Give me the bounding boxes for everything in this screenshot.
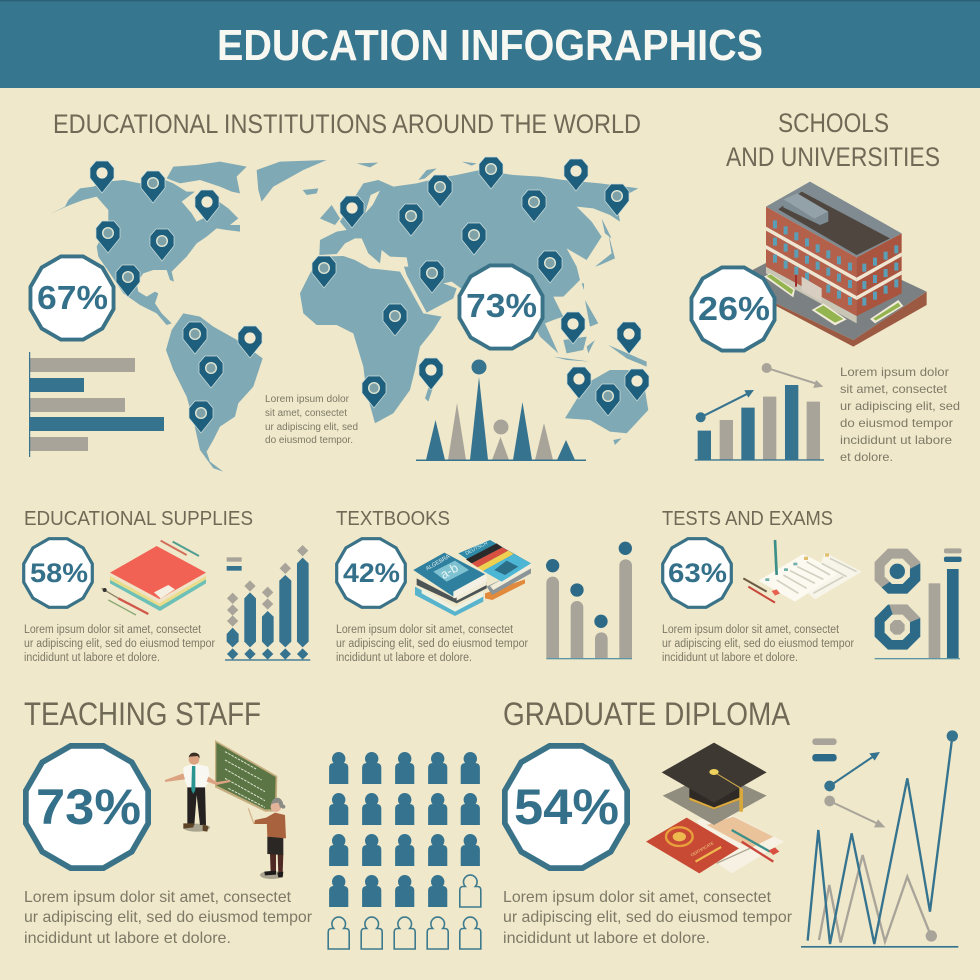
heading: educational institutions: EDUCATIONAL INSTITUTIONS AROUND THE WORLD: [53, 109, 641, 139]
illustration: exam sheets and pens: [743, 540, 862, 603]
panel: educational supplies: [24, 508, 310, 664]
heading: schools and universities: SCHOOLS: [778, 108, 889, 138]
badge: 73%: 73%: [36, 779, 141, 835]
text block: Lorem ipsum dolor sit amet, consectet: [503, 889, 772, 906]
badge: 58%: [24, 539, 92, 607]
Eurasia: [319, 170, 638, 353]
heading: schools and universities: [726, 108, 940, 172]
badge: 26%: 26%: [698, 290, 770, 327]
illustration: school building: [730, 182, 927, 347]
Arctic islands: [167, 162, 247, 193]
map caption text: [265, 394, 358, 446]
New Guinea: [608, 345, 647, 367]
heading: TESTS AND EXAMS: [662, 508, 833, 530]
text block: ur adipiscing elit, sed do eiusmod tempor: [336, 638, 528, 650]
text block: Lorem ipsum dolor sit amet, consectet: [24, 624, 202, 636]
text block: [662, 624, 854, 664]
illustration: stack of books: a-b: [438, 561, 461, 582]
schools text block: et dolore.: [840, 450, 893, 464]
Arctic islands: [418, 168, 437, 180]
Greenland: [257, 160, 327, 202]
text block: Lorem ipsum dolor sit amet, consectet: [336, 624, 514, 636]
text block: ur adipiscing elit, sed do eiusmod tempor: [662, 638, 854, 650]
text block: incididunt ut labore et dolore.: [24, 930, 231, 947]
schools text block: incididunt ut labore: [840, 433, 952, 447]
badge: 58%: 58%: [30, 558, 88, 588]
schools text block: sit amet, consectet: [840, 382, 948, 396]
map caption text: sit amet, consectet: [265, 408, 347, 419]
text block: ur adipiscing elit, sed do eiusmod tempor: [503, 909, 793, 926]
heading: EDUCATIONAL SUPPLIES: [24, 508, 253, 530]
text block: [336, 624, 528, 664]
badge: 42%: 42%: [343, 558, 400, 588]
badge: 63%: 63%: [668, 558, 727, 588]
illustration: cap and certificate: [646, 743, 784, 873]
Baltic sea: [365, 191, 380, 213]
octagon and bar chart: [875, 548, 962, 659]
South America: [166, 313, 263, 472]
Australia: [565, 370, 648, 433]
Britain: [320, 205, 340, 225]
illustration: cap and certificate: CERTIFICATE: [690, 840, 715, 858]
heading: TEXTBOOKS: [336, 508, 450, 530]
badge: 54%: 54%: [514, 779, 619, 835]
illustration: teachers at blackboard: [165, 740, 286, 879]
Madagascar: [425, 387, 433, 402]
badge: 73%: [26, 746, 148, 868]
horizontal bar chart: [29, 352, 164, 457]
text block: ur adipiscing elit, sed do eiusmod tempor: [24, 638, 215, 650]
badge: 67%: [30, 256, 114, 340]
text block: Lorem ipsum dolor sit amet, consectet: [24, 889, 292, 906]
schools text block: do eiusmod tempor: [840, 416, 953, 430]
schools text block: [840, 365, 960, 464]
North America: [50, 175, 240, 325]
Japan and Sakhalin: [595, 233, 615, 267]
text block: [503, 889, 793, 947]
Iceland: [303, 188, 318, 195]
badge: 63%: [663, 539, 731, 607]
panel: graduate diploma: [503, 696, 958, 948]
badge: 26%: [691, 267, 775, 351]
illustration: notebooks and brushes: [102, 541, 206, 615]
badge: 54%: [505, 746, 627, 868]
heading: GRADUATE DIPLOMA: [503, 696, 791, 732]
world map: Europe, Africa, Asia, Australia: [300, 162, 648, 445]
badge: 67%: 67%: [37, 279, 108, 316]
badge: 73% map: 73%: [466, 287, 537, 324]
map location pins: [90, 157, 649, 433]
lollipop bar chart: [546, 542, 632, 659]
header band with title: [0, 0, 980, 88]
text block: incididunt ut labore et dolore.: [24, 652, 160, 664]
Africa: [300, 256, 442, 423]
schools text block: Lorem ipsum dolor: [840, 365, 949, 379]
pictogram: people count: [328, 752, 481, 949]
illustration: stack of books: [413, 540, 531, 616]
map caption text: do eiusmod tempor.: [265, 435, 353, 446]
heading: TEACHING STAFF: [24, 696, 261, 732]
diamond bar chart: [225, 545, 310, 661]
text block: ur adipiscing elit, sed do eiusmod tempor: [24, 909, 313, 926]
map caption text: Lorem ipsum dolor: [265, 394, 350, 405]
text block: incididunt ut labore et dolore.: [662, 652, 798, 664]
badge: 42%: [337, 539, 405, 607]
text block: [24, 889, 313, 947]
panel: tests and exams: [662, 508, 962, 664]
text block: Lorem ipsum dolor sit amet, consectet: [662, 624, 840, 636]
text block: [24, 624, 215, 664]
bar chart with trend arrows: [695, 363, 824, 461]
header band with title: EDUCATION INFOGRAPHICS: [217, 21, 763, 70]
triangle chart: [416, 360, 586, 461]
panel: teaching staff: [24, 696, 481, 949]
panel: textbooks: [336, 508, 632, 664]
map caption text: ur adipiscing elit, sed: [265, 422, 358, 433]
illustration: stack of books: ALGEBRA: [425, 554, 451, 572]
Southeast Asia islands: [582, 283, 584, 290]
schools text block: ur adipiscing elit, sed: [840, 399, 960, 413]
illustration: stack of books: DEUTSCH: [465, 540, 489, 557]
text block: incididunt ut labore et dolore.: [336, 652, 472, 664]
heading: schools and universities: AND UNIVERSITIES: [726, 142, 940, 172]
line chart with arrows: [801, 730, 958, 948]
badge: 73% map: [459, 265, 543, 349]
text block: incididunt ut labore et dolore.: [503, 930, 710, 947]
world map: Americas: [50, 160, 327, 472]
